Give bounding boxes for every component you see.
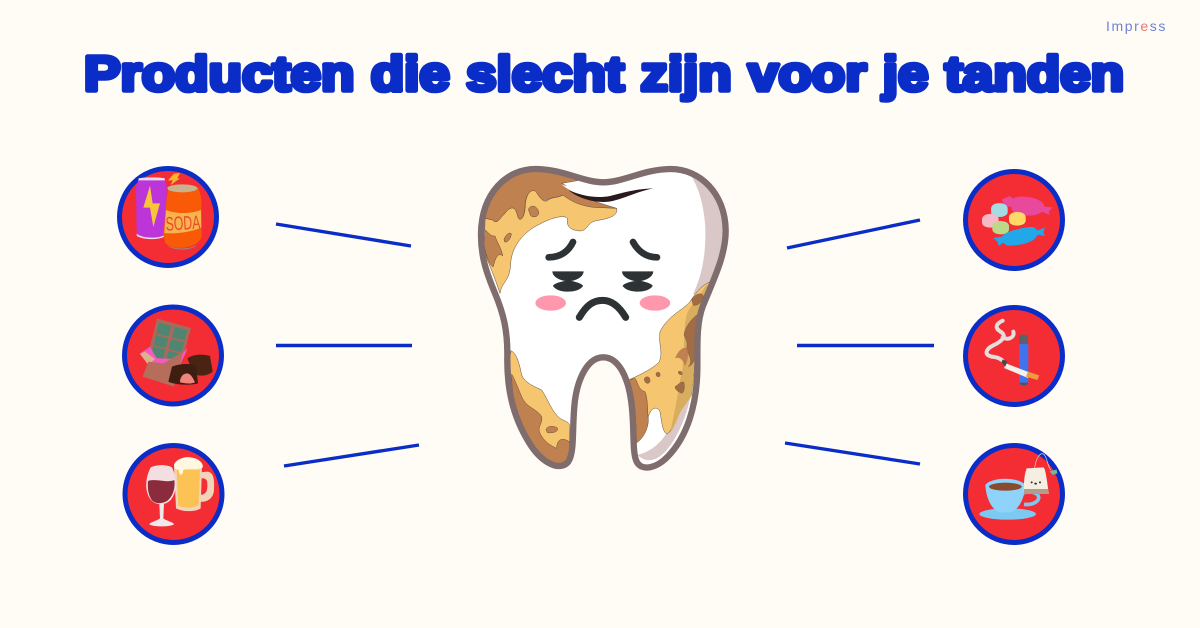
- coffee: [989, 483, 1022, 491]
- badge circle: [966, 308, 1062, 404]
- icon badge: candy: [966, 172, 1062, 268]
- right eyebrow: [633, 242, 657, 257]
- lower right root shading: [637, 398, 690, 460]
- left brown patch: [484, 230, 503, 267]
- tooth body: [481, 169, 726, 468]
- glasses: [146, 457, 214, 526]
- lower right darker yellow shading: [670, 283, 711, 433]
- lower right orange patch: [675, 348, 688, 366]
- upper left brown stain: [485, 170, 617, 222]
- tea bag bottom: [1024, 489, 1049, 494]
- praline front: [168, 364, 198, 385]
- wine glass bowl: [146, 465, 176, 504]
- square 2: [172, 327, 187, 341]
- icon badge: energy drink and soda: [120, 168, 216, 266]
- praline back: [187, 355, 213, 376]
- purple can: [136, 177, 167, 238]
- cigarette paper: [1004, 363, 1030, 378]
- cigarette and vape: [987, 321, 1039, 386]
- pink wrapped candy: [1002, 196, 1053, 216]
- icon badge: smoking and vape: [966, 308, 1062, 404]
- central tooth illustration: [481, 169, 726, 468]
- square 1: [156, 323, 171, 337]
- beer mug handle: [200, 472, 214, 502]
- cup: [985, 479, 1025, 512]
- tea bag: [1024, 467, 1049, 494]
- flying spark: [168, 173, 180, 185]
- connector lines: [276, 220, 934, 466]
- badge circle: [966, 172, 1062, 268]
- badge circle: [125, 446, 222, 542]
- title: Producten die slecht zijn voor je tanden: [84, 48, 1124, 102]
- arrow line: alcohol: [284, 445, 419, 466]
- vape body: [1019, 344, 1028, 386]
- sad face: [535, 242, 670, 317]
- sweets: [982, 196, 1053, 246]
- lower left brown stain: [512, 374, 570, 464]
- tea bag string: [1035, 454, 1051, 470]
- purple can rim: [137, 177, 166, 239]
- wine: [148, 480, 175, 503]
- icon badge: wine and beer: [125, 446, 222, 542]
- tea tag: [1049, 470, 1057, 475]
- right blush: [640, 295, 670, 311]
- can bottom: [167, 242, 199, 250]
- arrow line: smoking: [797, 344, 934, 347]
- orange can: [163, 185, 202, 248]
- pink round candy: [982, 214, 999, 228]
- lightning on can: [143, 186, 160, 227]
- stain spots upper left: [504, 206, 539, 242]
- square 6: [166, 351, 181, 363]
- beer: [177, 470, 200, 508]
- smoke: [987, 321, 1014, 362]
- foil tan edge: [140, 352, 155, 365]
- arrow line: coffee and tea: [785, 443, 920, 464]
- brand logo: Impress: Impress: [1106, 18, 1167, 34]
- saucer: [979, 508, 1036, 520]
- beer foam: [174, 457, 203, 475]
- cigarette filter: [1026, 372, 1039, 380]
- badge circle: [124, 307, 222, 404]
- square 3: [154, 335, 168, 348]
- chocolate bar and pralines: [140, 318, 213, 387]
- mouth: [1034, 483, 1037, 485]
- cup handle: [1022, 492, 1039, 504]
- arrow line: candy: [787, 220, 920, 248]
- lower left yellow stain: [510, 351, 570, 463]
- soda text: SODA: [165, 213, 201, 236]
- vape top: [1019, 335, 1028, 344]
- can label: [164, 210, 201, 233]
- square 5: [151, 346, 165, 359]
- tea bag face: [1031, 481, 1041, 485]
- pink foil: [140, 347, 187, 368]
- icon badge: chocolate: [124, 307, 222, 404]
- crack highlight: [562, 184, 647, 197]
- lower right yellow stain: [630, 282, 711, 434]
- yellow round candy: [1009, 212, 1026, 226]
- beer mug: [174, 466, 202, 511]
- arrow line: chocolate: [276, 344, 412, 347]
- cigarette tip: [1001, 359, 1007, 367]
- tooth outline: [481, 169, 726, 468]
- vape bottom: [1019, 383, 1028, 386]
- badge circle: [120, 168, 216, 266]
- left eye: [1031, 481, 1033, 483]
- crack: [568, 188, 653, 202]
- green round candy: [992, 221, 1009, 234]
- left closed eye: [553, 272, 583, 291]
- wine stem and base: [149, 503, 174, 526]
- upper left yellow stain: [485, 190, 617, 293]
- left blush: [535, 295, 566, 311]
- cup and tea bag: [979, 454, 1057, 520]
- right shading: [690, 174, 723, 307]
- icon badge: coffee and tea: [966, 446, 1062, 542]
- arrow line: soda: [276, 224, 411, 246]
- blue round candy: [991, 203, 1008, 217]
- badge circle: [966, 446, 1062, 542]
- lower left spot: [546, 426, 558, 433]
- blue wrapped candy: [993, 227, 1045, 246]
- can top: [167, 184, 197, 192]
- frown: [579, 300, 626, 317]
- bar: [147, 318, 191, 368]
- square 4: [169, 339, 184, 352]
- stain spots lower right: [644, 294, 703, 393]
- right eye: [1039, 481, 1041, 483]
- lower right root brown stain: [628, 378, 648, 443]
- praline filling: [180, 373, 195, 383]
- left eyebrow: [549, 242, 573, 257]
- right closed eye: [622, 272, 653, 291]
- bar squares: [151, 323, 187, 363]
- wrapper: [143, 352, 183, 387]
- lower right brown stain: [684, 313, 699, 367]
